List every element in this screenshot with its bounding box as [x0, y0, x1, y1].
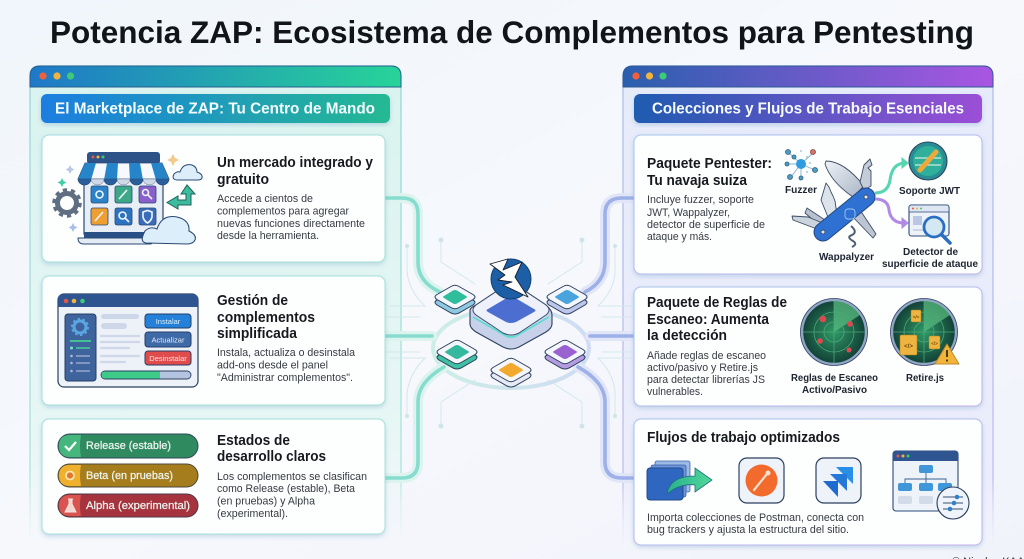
panel frame: right window	[623, 66, 993, 550]
card heading	[217, 293, 315, 342]
card text: Accede a cientos de	[217, 193, 313, 205]
add-on tile: top left teal	[435, 285, 475, 314]
card heading	[647, 156, 772, 189]
panel heading: Colecciones y Flujos de Trabajo Esenciales	[652, 100, 964, 118]
card heading: simplificada	[217, 326, 298, 342]
icon: Retire.js radar: </>	[913, 314, 920, 320]
card text: activo/pasivo y Retire.js	[647, 362, 759, 374]
card heading: Estados de	[217, 433, 290, 449]
icon: site structure window	[893, 451, 969, 519]
card: flujos de trabajo	[634, 419, 982, 545]
status pill: beta	[58, 464, 198, 487]
card text: nuevas funciones directamente	[217, 218, 365, 230]
icon: Jira	[816, 458, 861, 503]
card text: complementos para agregar	[217, 206, 349, 218]
card text	[647, 512, 864, 536]
icon: JWT badge	[909, 142, 947, 180]
status pill: alpha: Alpha (experimental)	[86, 500, 190, 512]
card heading: Escaneo: Aumenta	[647, 312, 770, 328]
title: Potencia ZAP: Ecosistema de Complementos para Pentesting	[50, 14, 974, 50]
card text: Instala, actualiza o desinstala	[217, 347, 355, 359]
card text: para detectar librerías JS	[647, 374, 765, 386]
card heading: Paquete Pentester:	[647, 156, 772, 172]
card text: ataque y más.	[647, 231, 712, 243]
label: Retire.js: Retire.js	[906, 373, 944, 384]
icon: collections import	[647, 461, 712, 500]
card heading: complementos	[217, 310, 315, 326]
card: gestion de complementos	[42, 276, 385, 405]
status pill: release	[58, 434, 198, 458]
add-on tile: mid left green	[437, 340, 477, 369]
label: Reglas de Escaneo Activo/Pasivo: Activo/Pasivo	[802, 385, 867, 396]
arrow: to detector	[875, 199, 908, 228]
icon: Retire.js radar: </>	[931, 341, 938, 346]
card heading: Gestión de	[217, 293, 288, 309]
card text: detector de superficie de	[647, 219, 765, 231]
icon: swiss army knife	[792, 159, 876, 247]
card heading: la detección	[647, 328, 727, 344]
status pill: alpha	[58, 494, 198, 517]
card heading: gratuito	[217, 172, 269, 188]
card heading: desarrollo claros	[217, 449, 326, 465]
card text: Importa colecciones de Postman, conecta con	[647, 512, 864, 524]
label: Detector de superficie de ataque: superficie de ataque	[882, 259, 978, 270]
add-on tile: bottom orange	[491, 358, 531, 387]
card text	[647, 194, 765, 243]
icon: Retire.js radar: </>	[904, 344, 913, 350]
panel: El Marketplace de ZAP	[41, 94, 390, 534]
panel heading	[41, 94, 390, 123]
label: Detector de superficie de ataque	[882, 247, 978, 270]
panel: Colecciones y Flujos de Trabajo	[634, 94, 982, 545]
hub platform	[470, 285, 552, 349]
status pill: beta: Beta (en pruebas)	[86, 470, 173, 482]
icon: storefront laptop	[54, 152, 202, 244]
card text: vulnerables.	[647, 386, 703, 398]
panel heading: El Marketplace de ZAP: Tu Centro de Mando	[55, 100, 375, 118]
card heading: Paquete de Reglas de	[647, 295, 787, 311]
card heading: Tu navaja suiza	[647, 173, 748, 189]
status pill: release: Release (estable)	[86, 440, 171, 452]
card text	[217, 471, 367, 520]
card text: como Release (estable), Beta	[217, 483, 355, 495]
label: Soporte JWT: Soporte JWT	[899, 186, 961, 197]
icon: add-on manager window	[58, 294, 198, 387]
card text: desde la herramienta.	[217, 230, 319, 242]
card heading	[217, 433, 326, 465]
card heading: Un mercado integrado y	[217, 155, 374, 171]
card text: bug trackers y ajusta la estructura del sitio.	[647, 524, 849, 536]
icon: add-on manager window: Instalar	[156, 317, 181, 326]
card text: JWT, Wappalyzer,	[647, 207, 730, 219]
card text	[217, 193, 365, 242]
card heading: Flujos de trabajo optimizados	[647, 430, 840, 446]
card text: Los complementos se clasifican	[217, 471, 367, 483]
card text: Incluye fuzzer, soporte	[647, 194, 754, 206]
icon: attack surface detector	[909, 205, 950, 243]
card: paquete pentester	[634, 135, 982, 274]
central hub: ZAP platform with add-on tiles	[435, 259, 587, 387]
card heading	[217, 155, 374, 188]
icon: Postman	[739, 458, 784, 503]
label: Reglas de Escaneo Activo/Pasivo: Reglas de Escaneo	[791, 373, 878, 384]
card: mercado integrado	[42, 135, 385, 262]
icon: radar active passive	[800, 298, 868, 366]
card text	[217, 347, 355, 384]
card: reglas de escaneo	[634, 287, 982, 406]
icon: fuzzer network	[785, 150, 818, 180]
arrow: to Soporte JWT	[875, 158, 908, 193]
label: Reglas de Escaneo Activo/Pasivo	[791, 373, 878, 396]
card text: (experimental).	[217, 508, 288, 520]
card: estados de desarrollo	[42, 419, 385, 534]
panel frame: left window	[30, 66, 401, 545]
label: Fuzzer: Fuzzer	[785, 185, 817, 196]
icon: ZAP lightning logo	[490, 259, 531, 299]
add-on tile: mid right purple	[545, 340, 585, 369]
label: Wappalyzer: Wappalyzer	[819, 252, 874, 263]
card text: "Administrar complementos".	[217, 372, 353, 384]
add-on tile: top right blue	[547, 285, 587, 314]
panel heading	[634, 94, 982, 123]
card text: (en pruebas) y Alpha	[217, 496, 315, 508]
label: Detector de superficie de ataque: Detector de	[903, 247, 958, 258]
card text	[647, 350, 766, 398]
card heading	[647, 295, 787, 344]
icon: add-on manager window: Actualizar	[152, 336, 185, 344]
card text: add-ons desde el panel	[217, 360, 328, 372]
card text: Añade reglas de escaneo	[647, 350, 766, 362]
connectors: circuit lines to hub	[385, 198, 635, 478]
icon: Retire.js radar	[890, 298, 959, 366]
icon: add-on manager window: Desinstalar	[149, 354, 187, 363]
